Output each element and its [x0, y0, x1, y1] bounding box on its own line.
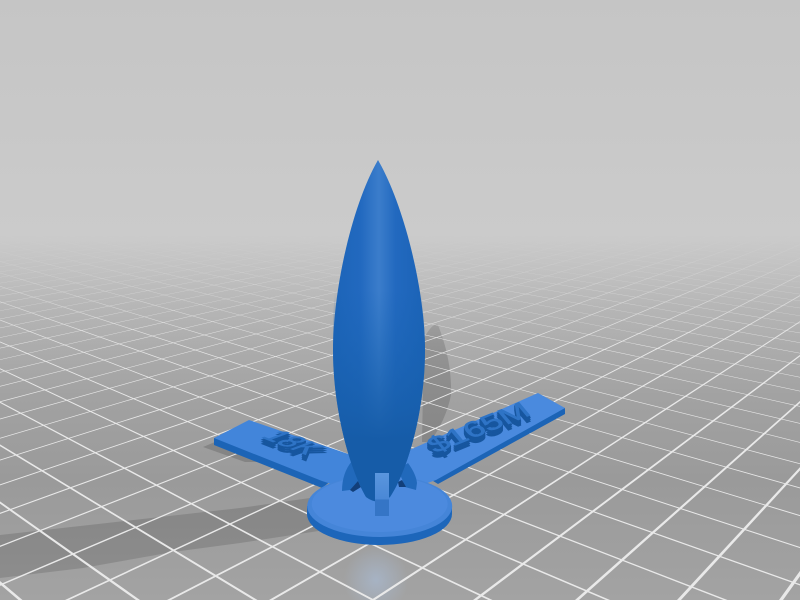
- rocket body lower shading: [333, 290, 425, 502]
- sky backdrop above the horizon: [0, 0, 800, 236]
- left arm value label: 18K: [253, 427, 332, 457]
- right arm: [380, 393, 565, 500]
- grid fade toward horizon: [0, 235, 800, 345]
- left arm value label: 18K: [253, 429, 332, 459]
- rear right fin: [398, 463, 417, 490]
- reflection under the base: [344, 546, 408, 600]
- right arm value label: $165M: [422, 402, 536, 462]
- rear left fin: [342, 461, 362, 491]
- right arm value label: $165M: [422, 398, 536, 458]
- left arm shadow: [203, 442, 270, 462]
- rear fin gaps: [350, 480, 406, 492]
- rocket: [333, 160, 425, 516]
- left arm: [214, 420, 380, 500]
- trophy base with arms: [214, 393, 565, 545]
- left arm value label: 18K: [253, 433, 332, 463]
- rocket side shadow: [422, 325, 451, 442]
- left arm value label: 18K: [253, 431, 332, 461]
- base disc: [307, 475, 452, 545]
- front fin: [375, 473, 389, 516]
- rocket body: [333, 160, 425, 502]
- rocket shadow on the ground: [0, 498, 325, 578]
- right arm value label: $165M: [422, 404, 536, 464]
- right arm value label: $165M: [422, 400, 536, 460]
